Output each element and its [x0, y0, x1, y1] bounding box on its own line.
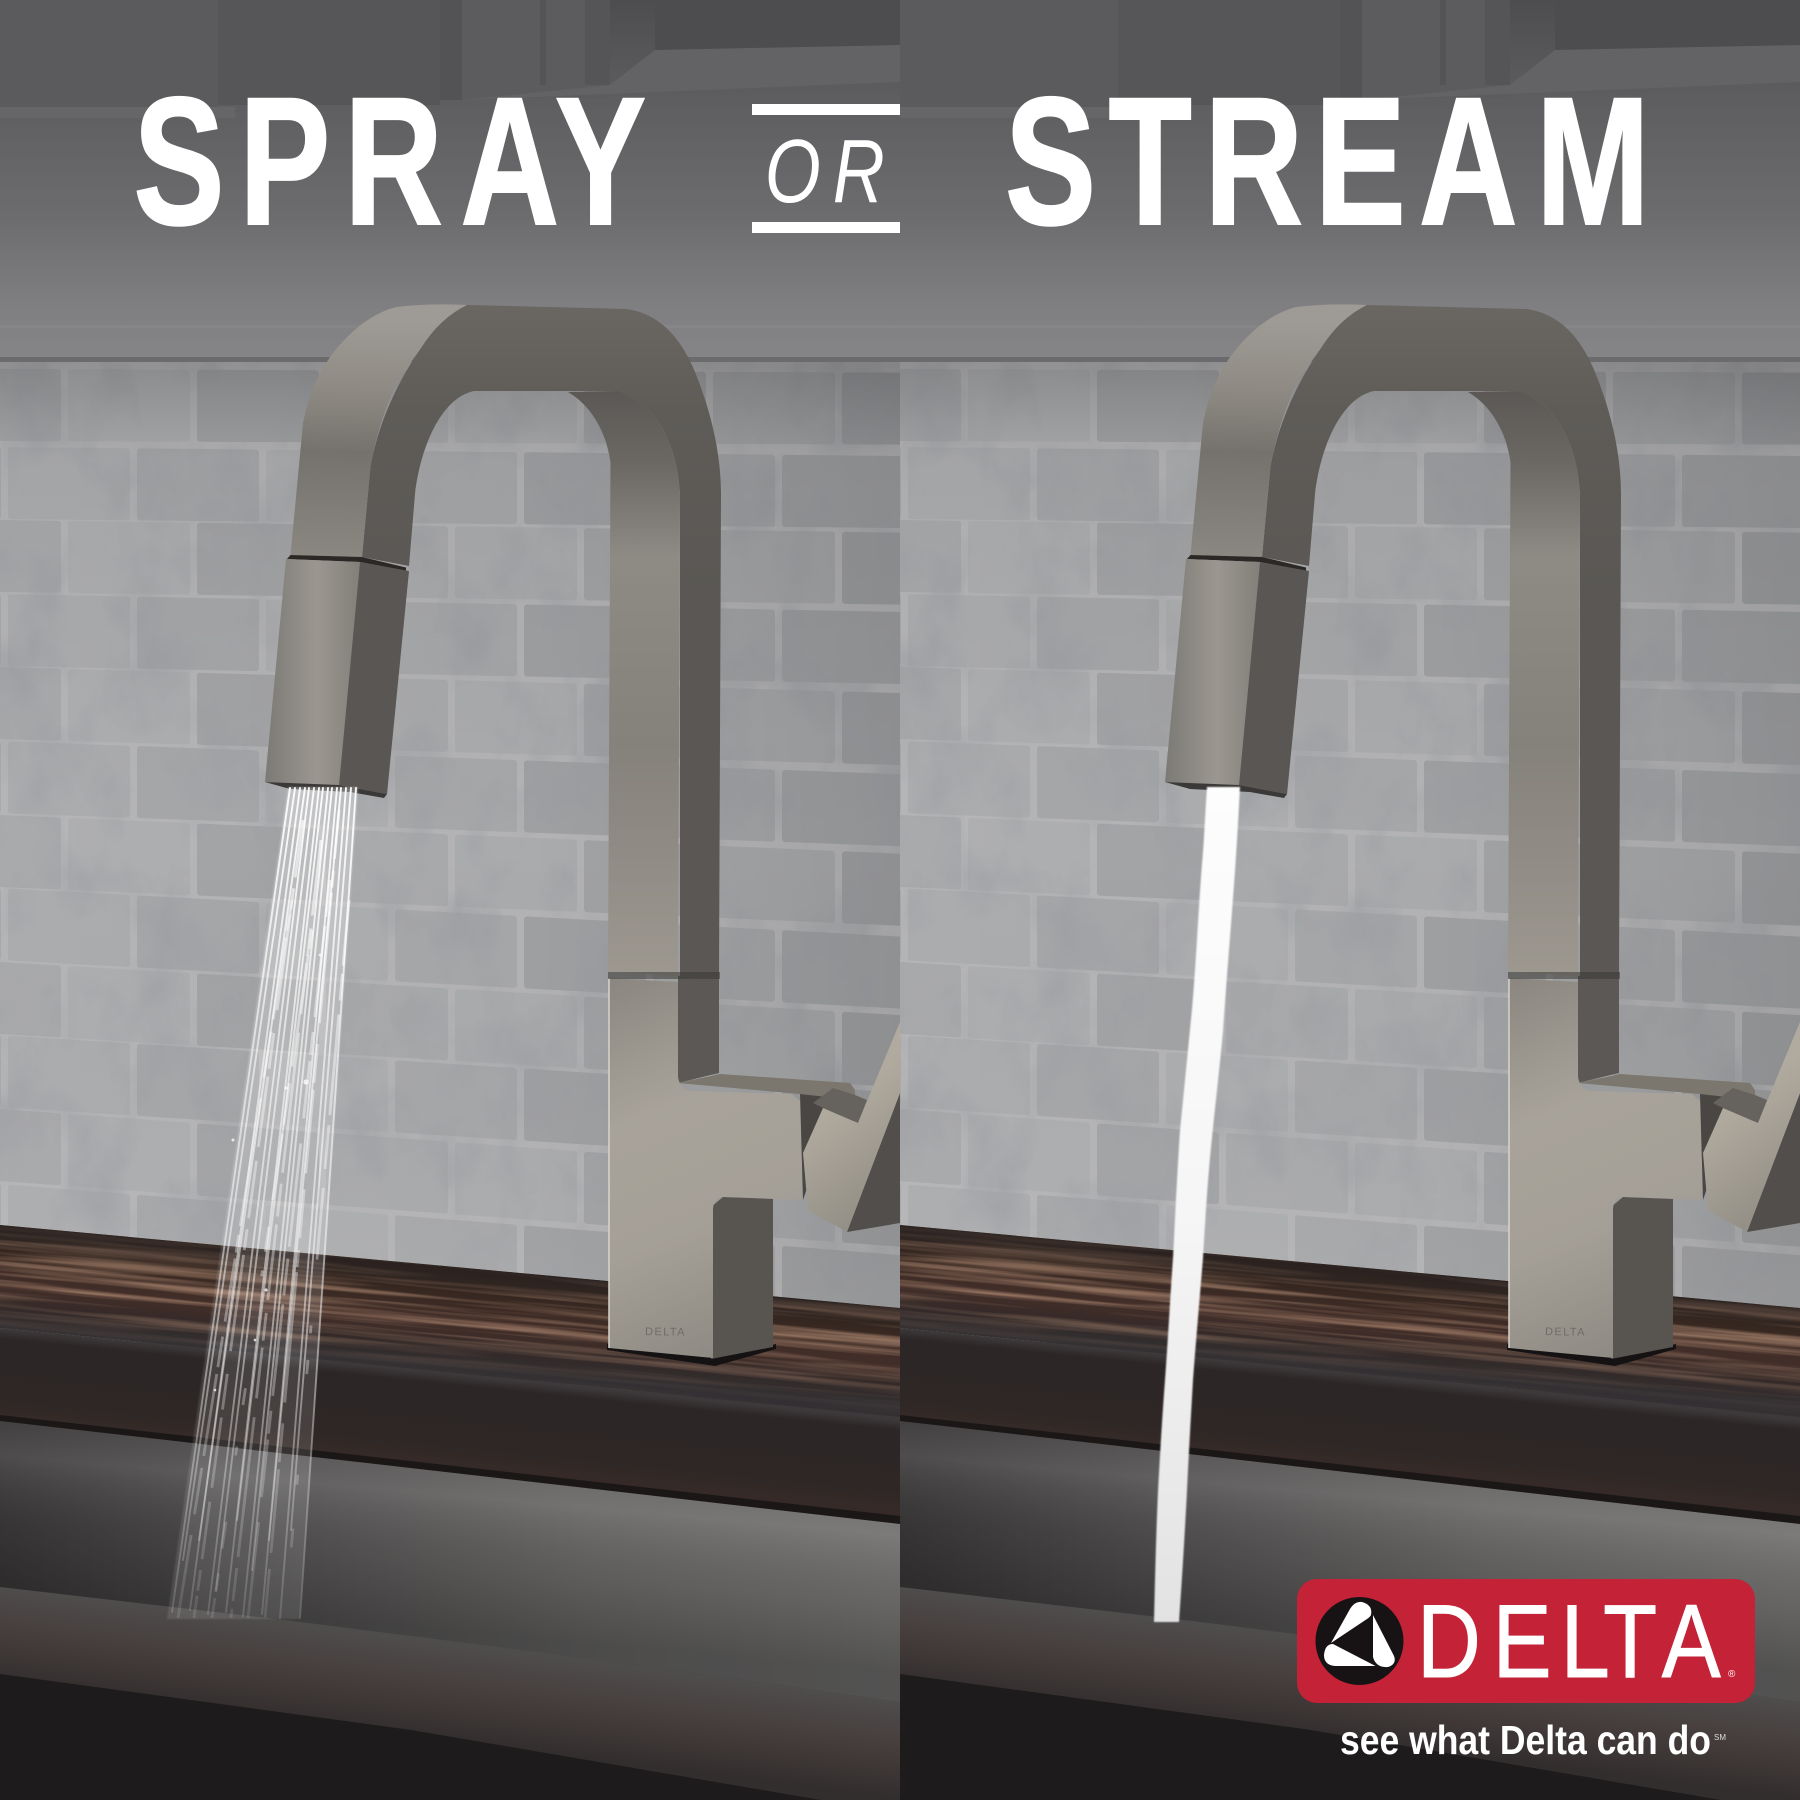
title: OR with rules: OR [765, 121, 885, 222]
title: STREAM: STREAM [1005, 60, 1650, 264]
faucet: spray panel [265, 304, 900, 1366]
title: OR with rules [752, 104, 900, 233]
faucet engraved logo left: DELTA [645, 1326, 686, 1339]
logo: wordmark: DELTA [1417, 1584, 1721, 1700]
logo: registered mark: ® [1728, 1669, 1736, 1680]
logo: red badge [1297, 1579, 1755, 1703]
faucet engraved logo right: DELTA [1545, 1326, 1586, 1339]
title: SPRAY: SPRAY [134, 60, 646, 264]
logo: triangle mark [1316, 1597, 1404, 1685]
water spray [167, 787, 358, 1619]
tagline service mark: SM [1714, 1733, 1726, 1742]
water stream [1154, 787, 1240, 1622]
Delta logo [1297, 1579, 1755, 1763]
background image: spray panel [0, 0, 964, 1800]
background image: stream panel [779, 0, 1800, 1800]
tagline: see what Delta can do [1340, 1717, 1711, 1763]
faucet: stream panel [1165, 304, 1800, 1366]
